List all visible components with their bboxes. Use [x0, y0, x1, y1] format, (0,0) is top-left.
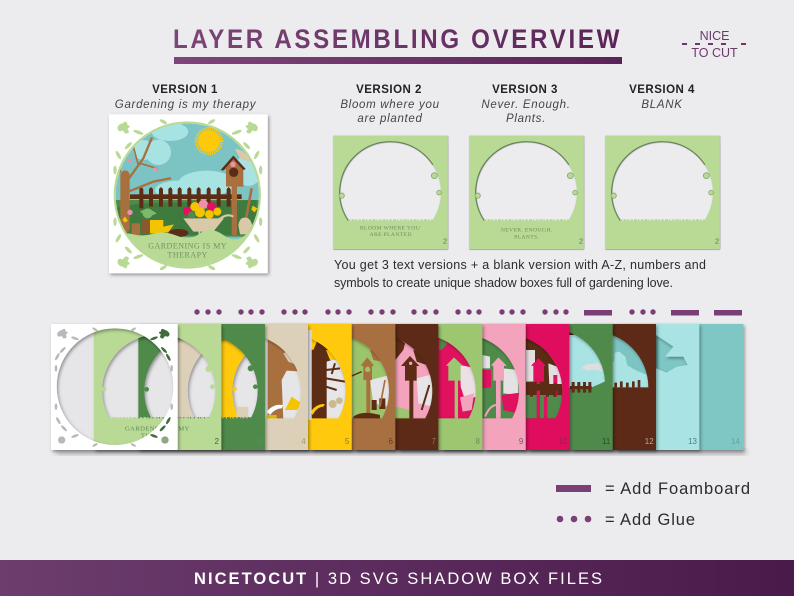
- layer 2 light green: 2: [215, 437, 220, 446]
- version 1 label: VERSION 1: [152, 84, 218, 96]
- version 3 label: VERSION 3: [492, 84, 558, 96]
- version 4 label: BLANK: [641, 99, 683, 111]
- legend: glue: = Add Glue: [605, 511, 695, 529]
- layer 10 magenta: [442, 324, 569, 450]
- layer 13 cyan: 13: [688, 437, 698, 446]
- version 3 panel: 2: [579, 237, 583, 246]
- version 2 label: [340, 84, 440, 125]
- layer 11 green: 11: [602, 437, 611, 446]
- version 3 panel: [469, 136, 584, 249]
- version 2 panel: ARE PLANTED: [370, 232, 412, 238]
- layer 9 pink: [399, 324, 526, 450]
- description text: [334, 258, 706, 290]
- version 4 panel: [605, 136, 720, 249]
- version 1 card: THERAPY: [168, 250, 208, 259]
- version 1 card: GARDENING IS MY: [148, 242, 227, 251]
- layer 14 teal: 14: [731, 437, 741, 446]
- layer 11 green: [486, 324, 613, 450]
- description text: You get 3 text versions + a blank version with A-Z, numbers and: [334, 258, 706, 272]
- layer 1 white: [51, 324, 178, 450]
- layer 4 tan: [178, 324, 312, 450]
- layer 3 dark green: [138, 324, 265, 450]
- footer band: [0, 560, 794, 596]
- logo: nice to cut: TO CUT: [691, 46, 738, 60]
- version 3 panel: PLANTS.: [514, 234, 539, 240]
- layer 8 green: [355, 324, 482, 450]
- layer strip: [51, 324, 746, 454]
- version 1 label: Gardening is my therapy: [115, 99, 257, 111]
- layer 8 green: 8: [476, 437, 481, 446]
- version 2 panel: 2: [443, 237, 447, 246]
- version 1 card: [109, 114, 268, 273]
- base behind front layers: [51, 324, 266, 450]
- layer 2 light green: [94, 324, 221, 450]
- layer 14 teal: [616, 324, 743, 450]
- version 4 label: VERSION 4: [629, 84, 695, 96]
- version 2 panel: [333, 136, 448, 249]
- version 3 label: Never. Enough.: [481, 99, 571, 111]
- layer 12 brown: [529, 324, 656, 450]
- version 3 panel: NEVER. ENOUGH.: [501, 227, 553, 233]
- legend: glue: [557, 511, 695, 529]
- layer 7 dark brown: 7: [432, 437, 437, 446]
- layer 2 light green: THERAPY: [141, 432, 174, 439]
- logo: nice to cut: [682, 29, 746, 60]
- layer 4 tan: 4: [301, 437, 306, 446]
- icon: sun: [197, 129, 221, 153]
- version 2 label: Bloom where you: [340, 99, 440, 111]
- assembly markers: glue dots and foamboard bars: [194, 309, 742, 316]
- version 2 panel: BLOOM WHERE YOU: [360, 225, 420, 231]
- footer text: NICETOCUT | 3D SVG SHADOW BOX FILES: [194, 570, 602, 588]
- layer 7 dark brown: [311, 324, 438, 450]
- version 3 label: [481, 84, 571, 125]
- version 4 label: [629, 84, 695, 111]
- layer 13 cyan: [572, 324, 699, 450]
- title underline: [174, 57, 622, 64]
- version 4 panel: 2: [715, 237, 719, 246]
- layer 2 light green: GARDENING IS MY: [125, 426, 190, 433]
- layer 12 brown: 12: [645, 437, 654, 446]
- legend: foamboard: = Add Foamboard: [605, 480, 750, 498]
- layer 9 pink: 9: [519, 437, 524, 446]
- logo: nice to cut: NICE: [700, 29, 729, 43]
- layer 5 yellow: 5: [345, 437, 350, 446]
- layer 3 dark green: 3: [258, 437, 263, 446]
- layer 6 brown: 6: [389, 437, 394, 446]
- title: LAYER ASSEMBLING OVERVIEW: [173, 24, 622, 54]
- version 3 label: Plants.: [506, 113, 546, 125]
- version 2 label: VERSION 2: [356, 84, 422, 96]
- description text: symbols to create unique shadow boxes full of gardening love.: [334, 276, 673, 290]
- layer 10 magenta: 10: [558, 437, 568, 446]
- version 1 label: [115, 84, 257, 111]
- layer 6 brown: [268, 324, 395, 450]
- version 2 label: are planted: [357, 113, 423, 125]
- layer 5 yellow: [221, 324, 352, 450]
